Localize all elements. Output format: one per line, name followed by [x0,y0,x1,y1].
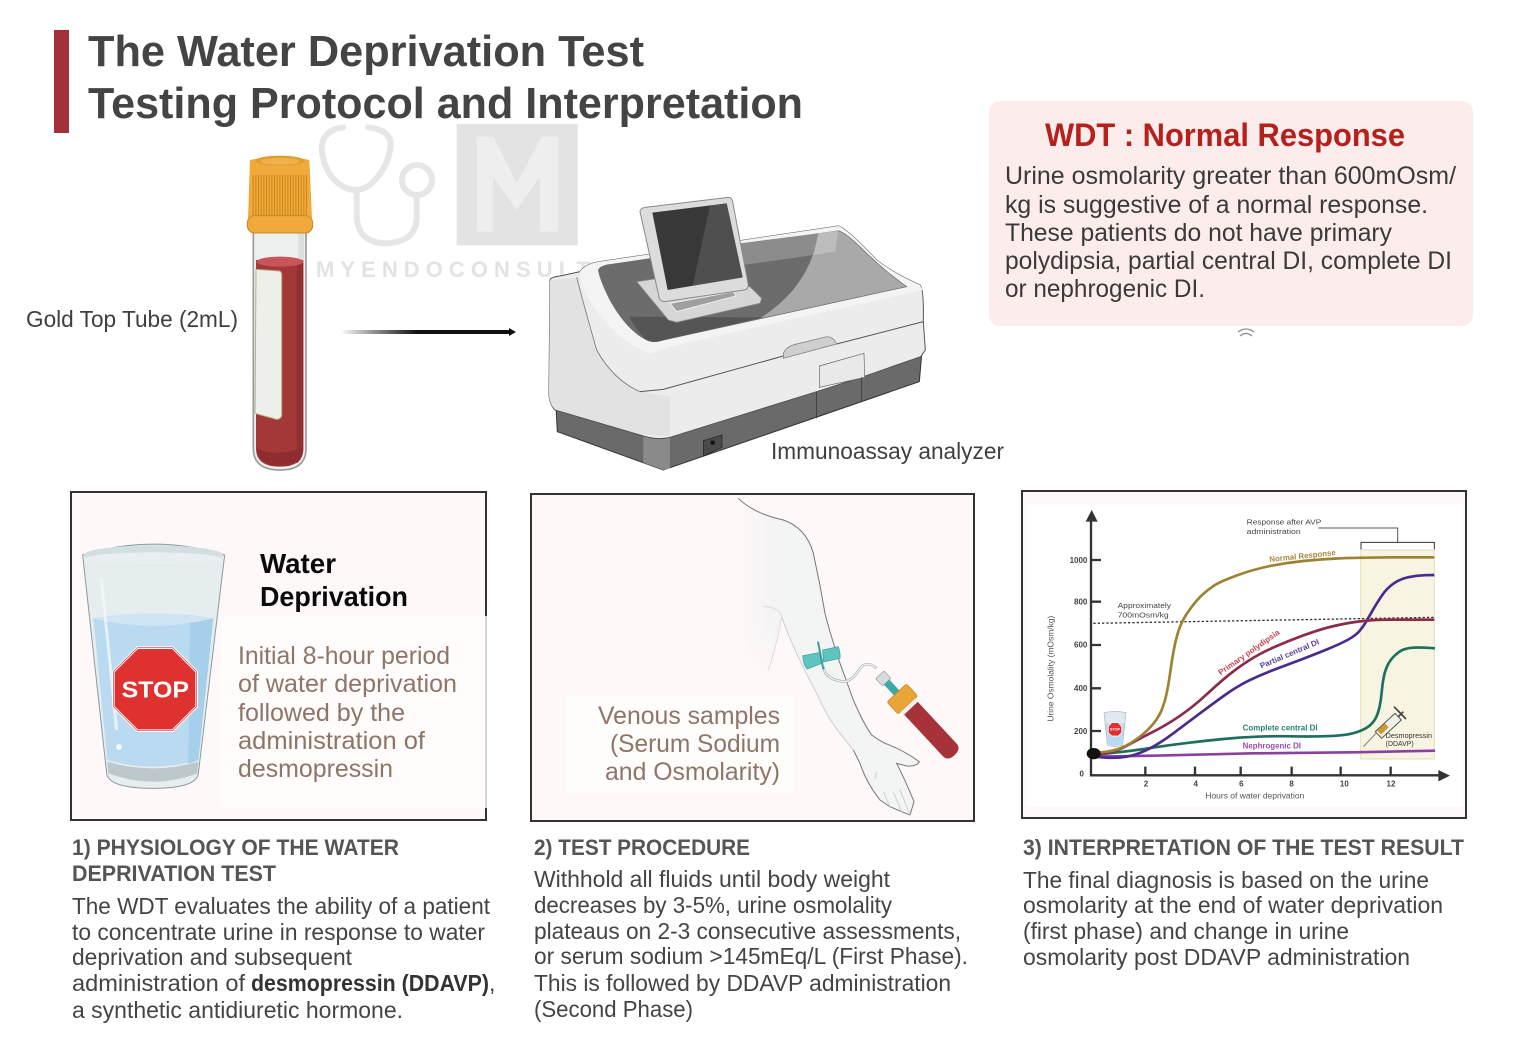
curve: primary polydipsia [1093,620,1434,755]
panel: water deprivation [71,492,487,820]
icon: immunoassay analyzer [549,197,925,470]
text: section 1 body: a synthetic antidiuretic hormone. [72,997,403,1023]
panel: interpretation chart: 6 [1239,780,1244,789]
callout: WDT normal response: or nephrogenic DI. [1005,275,1205,303]
text: section 1 body: deprivation and subsequent [72,944,353,970]
icon: small glass with stop sign [1104,711,1126,747]
bracket: response after AVP: administration [1247,527,1301,536]
label: immunoassay analyzer: Immunoassay analyzer [771,438,1004,464]
text: venous samples: (Serum Sodium [610,730,780,758]
arrow: tube to analyzer [340,328,516,336]
heading: section 1: 1) PHYSIOLOGY OF THE WATER [72,835,399,860]
text: section 1 body: The WDT evaluates the ability of a patient [72,893,491,919]
curve: normal response [1093,557,1434,753]
axes [1091,520,1440,775]
text: water deprivation description: desmopressin [238,755,393,783]
text: water deprivation description: Initial 8-hour period [238,642,450,670]
section 3: interpretation [1023,835,1465,970]
text: venous samples: Venous samples [598,702,780,730]
watermark: MyEndoConsult logo [316,124,591,282]
callout: WDT normal response: polydipsia, partial central DI, complete DI [1005,247,1452,275]
curve: nephrogenic DI [1093,751,1435,757]
heading: section 1 [72,835,399,886]
callout: WDT normal response: These patients do not have primary [1005,219,1392,247]
curve labels [1217,548,1337,751]
heading: water deprivation [260,548,408,612]
axis tick labels: 800 [1074,598,1088,607]
axis tick labels [1070,556,1088,779]
panel: interpretation chart: Urine Osmolality (mOsm/kg) [1046,615,1055,722]
curve labels: Nephrogenic DI [1243,742,1301,751]
icon: small glass with stop sign: STOP [1110,728,1121,732]
threshold label: Approximately [1118,601,1171,610]
heading: section 3: 3) INTERPRETATION OF THE TEST RESULT [1023,835,1465,860]
icon: gold top blood tube [247,156,313,470]
icon: desmopressin syringe [1363,707,1406,747]
text: section 2 body: Withhold all fluids until body weight [534,866,891,892]
callout: WDT normal response [989,101,1473,326]
label: gold top tube: Gold Top Tube (2mL) [26,306,238,332]
section 1: physiology [72,835,495,1023]
heading: section 1: DEPRIVATION TEST [72,861,277,886]
watermark: MyEndoConsult logo: MYENDOCONSULT [316,257,591,282]
label: desmopressin [1386,733,1432,748]
text: venous samples [598,702,780,786]
text: section 3 body: The final diagnosis is based on the urine [1023,867,1429,893]
text: water deprivation description: administration of [238,727,425,755]
curve labels: Partial central DI [1259,637,1320,671]
panel: venous sampling [531,494,974,821]
icon: arm with butterfly needle and tube [737,498,964,815]
text: section 1 body: desmopressin (DDAVP) [251,970,489,996]
panel: interpretation chart: 12 [1387,780,1396,789]
text: section 2 body: or serum sodium >145mEq/L (First Phase). [534,943,968,969]
text: section 3 body [1023,867,1443,970]
text: section 1 body: administration of [72,970,246,996]
panel: interpretation chart [1022,491,1466,818]
panel: interpretation chart: 4 [1193,780,1198,789]
text: section 2 body: (Second Phase) [534,996,693,1022]
icon: small wave mark [1238,329,1254,336]
threshold label: 700mOsm/kg [1118,610,1169,619]
text: section 1 body [72,893,495,1023]
callout: WDT normal response: kg is suggestive of a normal response. [1005,191,1428,219]
curve labels: Normal Response [1269,548,1337,564]
section 2: test procedure [534,835,968,1022]
icon: glass of water with stop sign [83,544,225,788]
panel: interpretation chart: 8 [1289,780,1294,789]
text: water deprivation description: followed by the [238,699,405,727]
text: section 3 body: (first phase) and change in urine [1023,918,1349,944]
icon: glass of water with stop sign: STOP [122,676,189,702]
label: desmopressin: Desmopressin [1386,733,1432,740]
text: section 2 body: decreases by 3-5%, urine osmolality [534,892,892,918]
panel: interpretation chart: 10 [1340,780,1349,789]
text: section 3 body: osmolarity post DDAVP administration [1023,944,1410,970]
text: section 3 body: osmolarity at the end of water deprivation [1023,892,1443,918]
title: The Water Deprivation Test [88,27,644,76]
title: Testing Protocol and Interpretation [88,79,803,128]
curve: partial central DI [1093,575,1434,758]
text: water deprivation description [238,642,457,783]
heading: water deprivation: Deprivation [260,581,408,612]
curve labels: Primary polydipsia [1217,628,1282,677]
bracket: response after AVP: Response after AVP [1247,518,1321,527]
callout: WDT normal response: WDT : Normal Response [1045,117,1405,153]
panel: interpretation chart: 2 [1144,780,1149,789]
shaded region: response after AVP [1361,550,1434,759]
text: water deprivation description: of water deprivation [238,670,457,698]
text: section 2 body: plateaus on 2-3 consecutive assessments, [534,918,961,944]
text: section 1 body: to concentrate urine in response to water [72,919,485,945]
axis titles: Hours of water deprivation [1205,792,1304,801]
threshold label [1118,601,1171,619]
curve labels: Complete central DI [1243,724,1318,733]
heading: section 2: 2) TEST PROCEDURE [534,835,750,860]
axis tick labels: 200 [1074,727,1088,736]
axis tick labels: 600 [1074,641,1088,650]
heading: water deprivation: Water [260,548,336,579]
text: venous samples: and Osmolarity) [605,758,780,786]
text: section 2 body [534,866,968,1022]
curve: complete central DI [1093,647,1435,755]
bracket: response after AVP [1247,518,1434,549]
text: section 2 body: This is followed by DDAVP administration [534,970,951,996]
threshold line [1093,617,1435,623]
callout: WDT normal response: Urine osmolarity greater than 600mOsm/ [1005,162,1456,190]
label: desmopressin: (DDAVP) [1386,741,1414,748]
axis tick labels: 0 [1080,770,1085,779]
start point [1087,748,1101,759]
axis tick labels: 400 [1074,684,1088,693]
title [88,27,803,128]
title bar accent [54,30,69,133]
axis tick labels: 1000 [1070,556,1088,565]
text: section 1 body: , [489,970,495,996]
